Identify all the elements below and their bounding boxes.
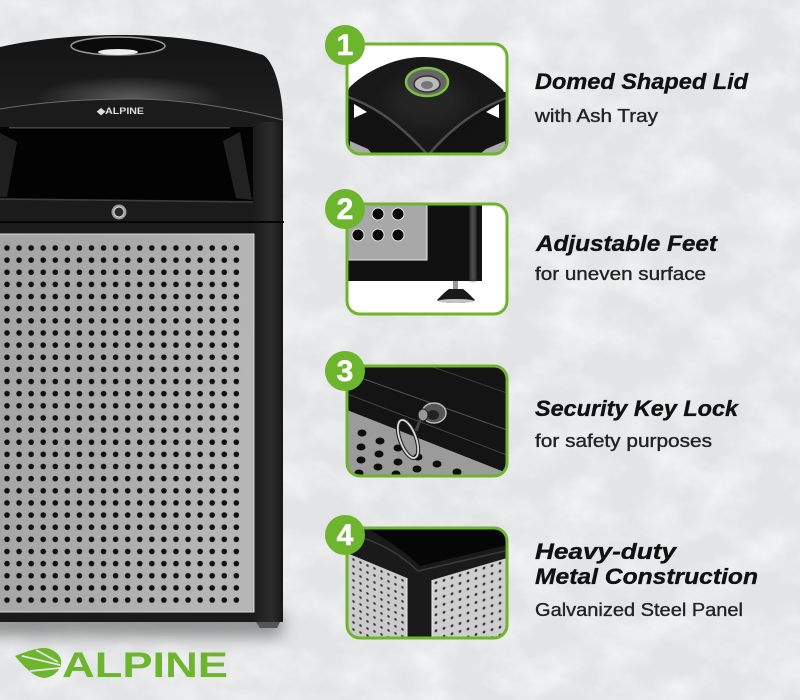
- feature text 3: [535, 396, 740, 451]
- panel 1: domed shaped lid: [325, 25, 507, 154]
- feature text 2: [535, 231, 719, 284]
- feature text 2: Adjustable Feet: [535, 231, 719, 256]
- photo: lock: [347, 366, 507, 478]
- number badge 2: [325, 189, 365, 229]
- number badge 3: [325, 351, 365, 391]
- feature text 2: for uneven surface: [535, 264, 706, 284]
- feature text 4: Galvanized Steel Panel: [535, 600, 743, 620]
- number badge 4: [325, 515, 365, 555]
- number badge 4: 4: [337, 519, 354, 552]
- domed lid: [0, 35, 283, 120]
- feature text 3: Security Key Lock: [535, 396, 740, 421]
- panel 3: security key lock: [325, 351, 507, 478]
- photo: steel corner: [347, 528, 507, 638]
- panel frame: [347, 528, 507, 638]
- number badge 2: 2: [337, 193, 353, 226]
- panel frame: [347, 366, 507, 476]
- door seam: [0, 221, 284, 223]
- floor shadow: [0, 612, 282, 636]
- door lock: [112, 204, 126, 220]
- feature text 1: Domed Shaped Lid: [535, 69, 749, 94]
- panel 4: heavy-duty metal construction: [325, 515, 507, 638]
- waste opening: [0, 127, 253, 202]
- perforated steel panel: [0, 234, 254, 612]
- panel frame: [347, 204, 507, 314]
- wordmark: ALPINE: [62, 646, 228, 685]
- ash tray ring: [71, 37, 165, 55]
- photo: lid: [347, 44, 507, 154]
- icon: leaf: [15, 648, 61, 678]
- feature text 4: [535, 539, 758, 620]
- number badge 1: 1: [337, 29, 353, 62]
- number badge 1: [325, 25, 365, 65]
- container body: [0, 98, 283, 622]
- lid brand mark: ◆ALPINE: [96, 106, 144, 116]
- feature text 1: with Ash Tray: [534, 106, 658, 126]
- panel frame: [347, 44, 507, 154]
- product: waste container: [0, 35, 284, 636]
- feature text 4: Heavy-duty: [535, 539, 678, 564]
- container foot: [256, 622, 280, 628]
- feature text 3: for safety purposes: [535, 431, 712, 451]
- photo: foot: [347, 204, 507, 314]
- panel 2: adjustable feet: [325, 189, 507, 314]
- container side highlight: [254, 122, 283, 622]
- feature text 4: Metal Construction: [535, 564, 758, 589]
- brand logo: Alpine: [15, 646, 228, 685]
- number badge 3: 3: [337, 355, 353, 388]
- feature text 1: [534, 69, 749, 126]
